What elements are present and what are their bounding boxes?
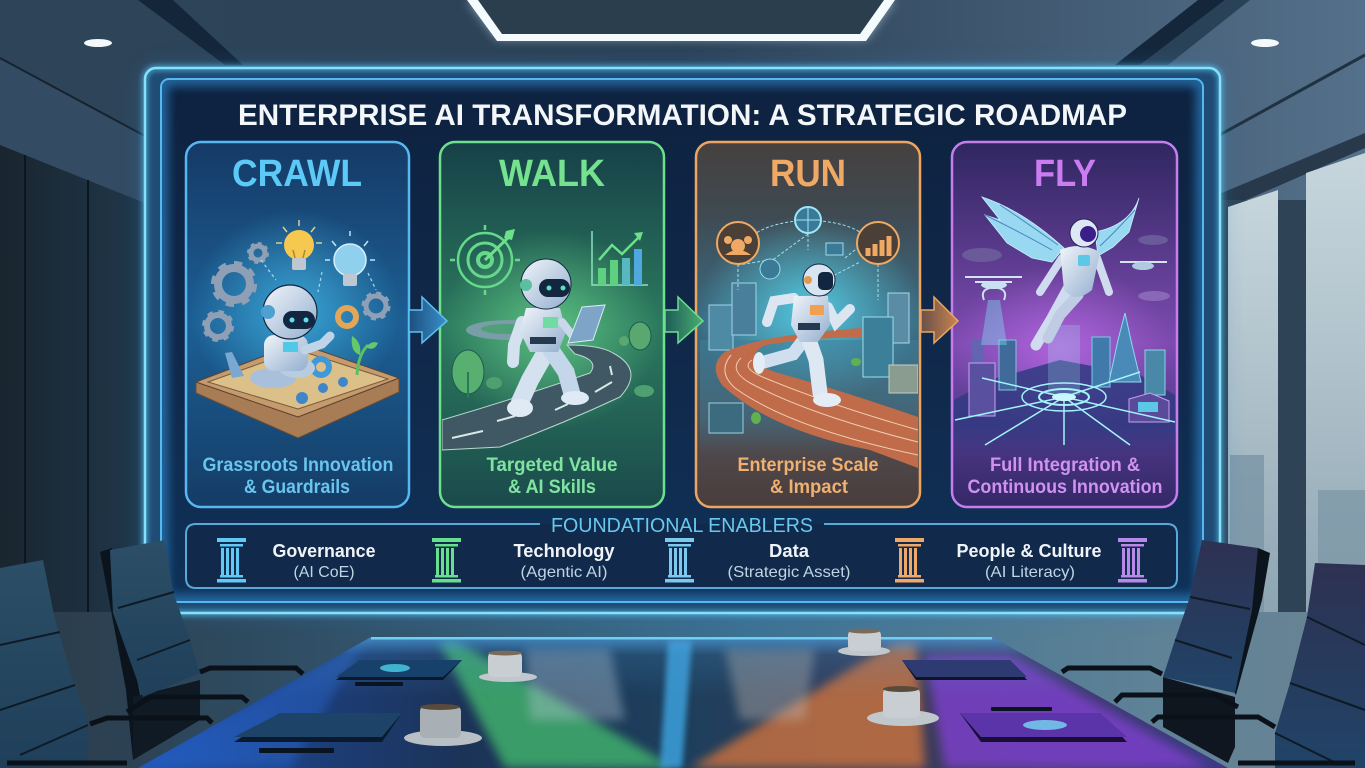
chair: far right back — [1163, 540, 1270, 763]
enabler: governance: (AI CoE) — [294, 564, 354, 581]
chair: armrests far — [90, 668, 303, 724]
conference table with colour reflections — [130, 637, 1230, 768]
tablets — [234, 660, 1127, 753]
arrow: walk to run — [665, 297, 703, 343]
panel: fly — [948, 142, 1177, 507]
enabler: governance: Governance — [272, 540, 376, 561]
chair: near left back — [0, 560, 88, 768]
caption: & AI Skills — [508, 477, 596, 498]
panel: crawl — [186, 142, 409, 507]
wings — [982, 197, 1139, 262]
left chairs — [0, 540, 303, 768]
caption — [202, 455, 394, 498]
caption: Full Integration & — [990, 455, 1140, 476]
icon: pillar light blue — [665, 538, 694, 582]
drones — [965, 262, 1167, 300]
enabler: technology — [514, 540, 615, 581]
right chairs — [1062, 540, 1365, 768]
caption — [486, 455, 618, 498]
enabler: governance — [272, 540, 376, 581]
caption: Grassroots Innovation — [202, 455, 394, 476]
chair: armrest near — [7, 760, 127, 766]
heading: walk: WALK — [499, 153, 606, 195]
caption — [738, 455, 878, 498]
title: ENTERPRISE AI TRANSFORMATION: A STRATEGIC ROADMAP — [238, 99, 1127, 132]
illustration: robot in sandbox with gears and bulbs — [190, 210, 400, 438]
arrow: run to fly — [921, 297, 958, 343]
robot — [507, 259, 605, 417]
robot — [753, 264, 850, 407]
chair: armrests far right — [1062, 668, 1275, 727]
enabler: data — [728, 540, 850, 581]
enabler: technology: Technology — [514, 540, 615, 561]
display wall screen — [145, 68, 1220, 613]
robot — [250, 285, 330, 388]
arrow: crawl to walk — [409, 297, 447, 343]
heading: fly: FLY — [1034, 153, 1096, 195]
chair: armrest near right — [1238, 760, 1355, 766]
caption: Enterprise Scale — [738, 455, 878, 476]
icon: pillar orange — [895, 538, 924, 582]
heading: foundational enablers: FOUNDATIONAL ENABLERS — [551, 515, 813, 537]
illustration: robot running on track through smart city — [698, 207, 922, 468]
caption: & Guardrails — [244, 477, 350, 498]
enabler: people and culture: People & Culture — [956, 540, 1102, 561]
caption: Continuous Innovation — [968, 477, 1162, 498]
enabler: people and culture: (AI Literacy) — [985, 564, 1075, 581]
caption: & Impact — [770, 477, 849, 498]
ceiling spot lights — [84, 39, 1279, 47]
outer glowing frame — [145, 68, 1220, 613]
icon: pillar green — [432, 538, 461, 582]
enabler: technology: (Agentic AI) — [520, 564, 608, 581]
heading: run: RUN — [770, 153, 846, 195]
robot — [1036, 219, 1109, 345]
enabler: people and culture — [956, 540, 1102, 581]
panel: run — [696, 142, 922, 507]
icon: pillar purple — [1118, 538, 1147, 582]
icon: pillar blue — [217, 538, 246, 582]
heading: crawl: CRAWL — [232, 153, 362, 195]
enabler: data: Data — [769, 540, 810, 561]
chair: far left back — [100, 540, 200, 760]
panel: foundational enablers — [186, 515, 1177, 588]
floor — [0, 612, 1365, 768]
panel: walk — [440, 142, 664, 507]
caption — [968, 455, 1162, 498]
caption: Targeted Value — [486, 455, 618, 476]
window view with skyline — [1220, 153, 1365, 650]
enabler: data: (Strategic Asset) — [728, 564, 850, 581]
coffee cups — [404, 628, 939, 746]
ceiling light frame — [467, 0, 895, 41]
inner panel — [161, 79, 1203, 602]
chair: near right back — [1275, 563, 1365, 768]
illustration: winged robot above futuristic city with drones — [948, 197, 1175, 455]
illustration: robot walking on road with target and chart — [440, 225, 660, 450]
